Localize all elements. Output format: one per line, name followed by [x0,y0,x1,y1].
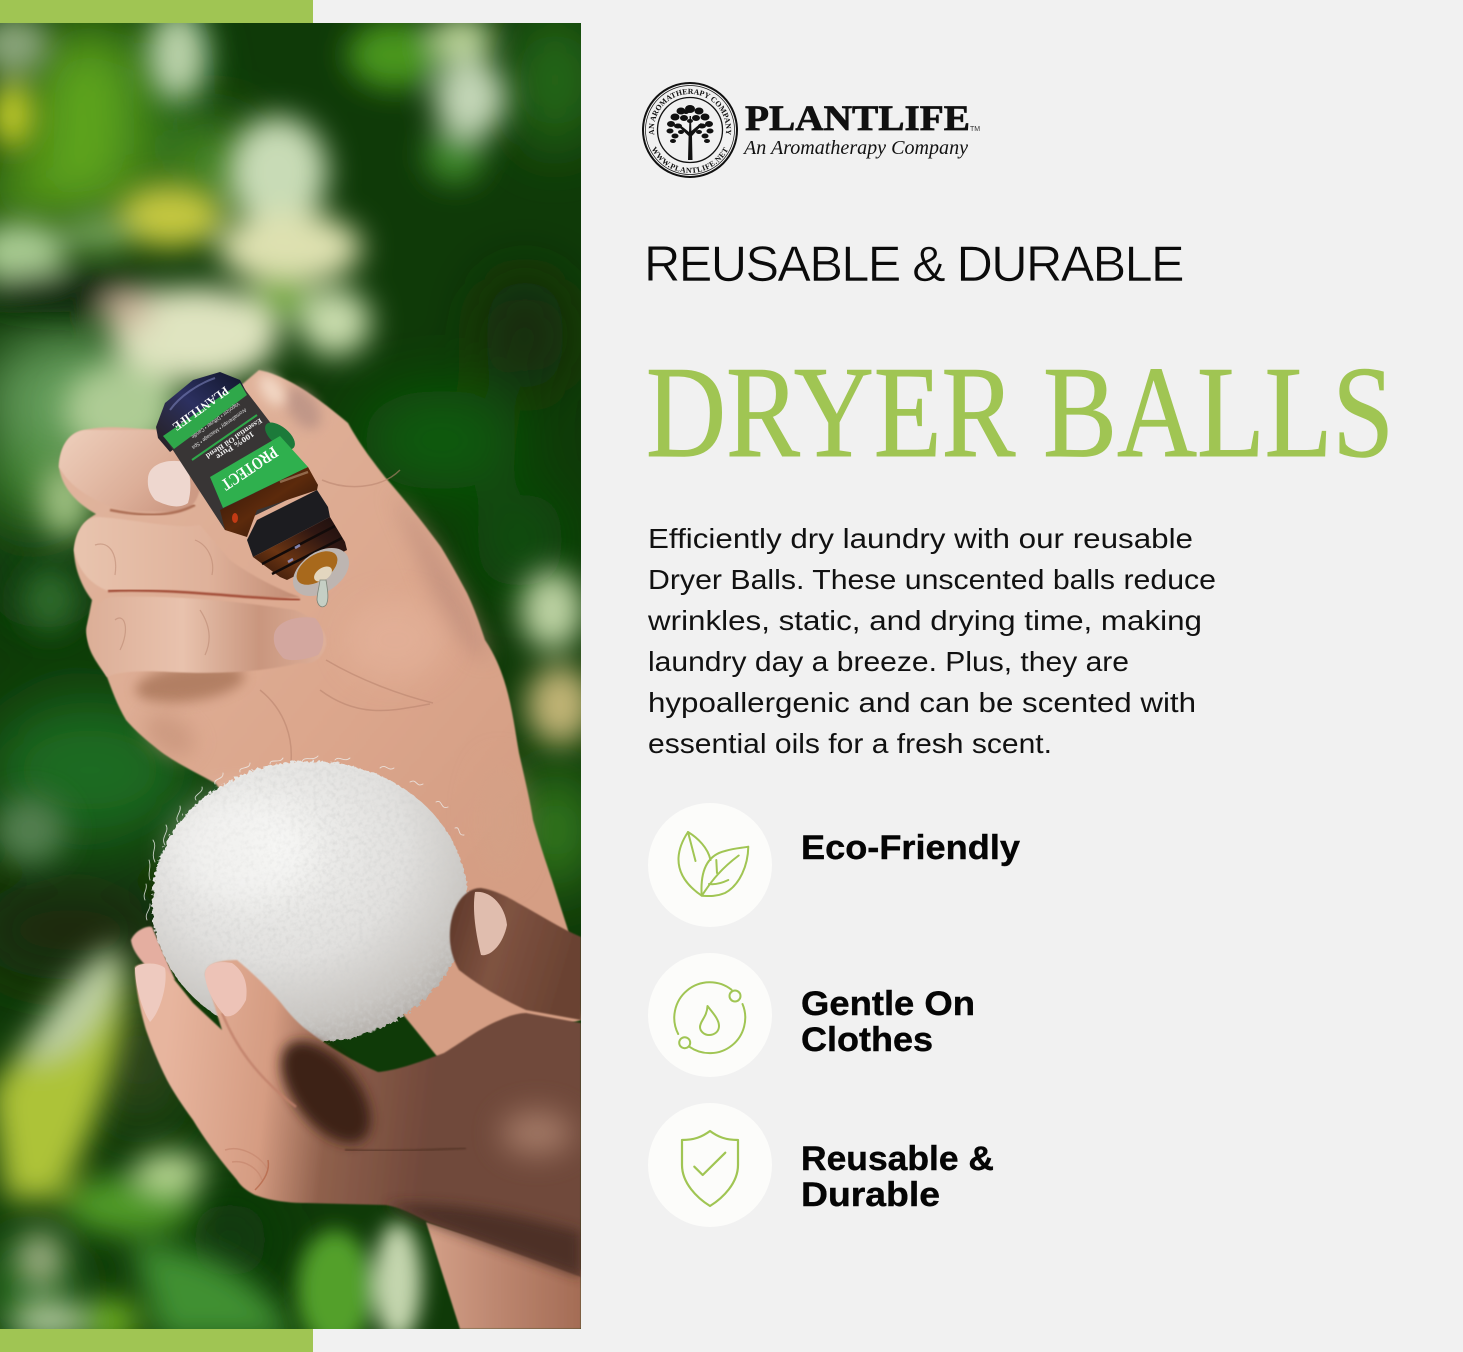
thumb [450,888,581,1020]
body paragraph: Dryer Balls. These unscented balls reduce [648,564,1216,595]
label text: uses: Aromatherapy • Massage • Spa [190,406,247,450]
trademark: TM [970,126,980,133]
wool dryer ball [144,756,468,1043]
bottle opening [284,538,358,606]
logo tagline: An Aromatherapy Company [742,137,968,159]
label text: Protect: PROTECT [217,443,281,495]
label [801,985,975,1059]
amber glass shoulder [220,467,318,537]
label text: uses 2: Vaporizer • Diffuser • Candle [190,400,240,439]
label: Durable [801,1176,940,1214]
label text: blend name: 100% Pure [214,429,256,462]
crease at back of hand [345,1148,466,1151]
palm creases [260,470,433,770]
palm and back of hand [135,960,581,1277]
essential oil bottle [156,372,358,607]
subheading: REUSABLE & DURABLE [644,236,1183,292]
ring finger [87,597,326,677]
feature: Reusable & Durable [648,1103,994,1227]
threaded neck [253,517,347,580]
neck threads [262,526,342,574]
body paragraph: laundry day a breeze. Plus, they are [648,646,1129,677]
feature: Eco-Friendly [648,803,1020,927]
label text: Plantlife: PLANTLIFE [170,384,231,434]
ring fingernail [274,617,323,660]
second finger nail [205,962,247,1016]
green pinstripe [192,415,257,460]
body paragraph: wrinkles, static, and drying time, making [647,605,1202,636]
lower hand [135,888,581,1277]
logo wordmark: PLANTLIFE [745,98,970,138]
icon: leaves [648,803,772,927]
wool highlights [170,795,310,905]
label text: essential oil blend: Essential Oil Blend [203,416,264,461]
bottom green accent bar [0,1329,313,1352]
thumb nail [474,892,507,955]
finger crease [222,1013,296,1107]
panel: photo of hands with bottle and dryer ball [0,0,594,1350]
label body [165,383,318,530]
feature: Gentle On Clothes [648,953,975,1077]
icon: water drop in orbit [648,953,772,1077]
stray wool fibres [144,756,464,920]
protect band [210,436,308,508]
foliage background [0,0,594,1350]
green band [163,383,247,449]
logo seal: AN AROMATHERAPY COMPANY [648,88,732,135]
logo seal: WWW.PLANTLIFE.NET [652,146,728,173]
dropper tip [311,563,335,585]
finger shadow on hand [272,1032,378,1150]
neck ring [247,490,330,557]
index finger [59,430,200,513]
body paragraph: hypoallergenic and can be scented with [648,687,1196,718]
upper hand [59,370,581,1060]
middle finger [74,517,300,598]
shoulder highlight [280,472,308,482]
body paragraph: Efficiently dry laundry with our reusable [648,523,1193,554]
logo seal [642,82,738,178]
knuckle lines [95,540,213,655]
first finger nail [135,964,166,1022]
hand silhouette [59,370,581,1060]
label: Gentle On [801,985,975,1023]
oil drop [317,580,328,607]
logo: Plantlife [642,82,980,178]
hand shading [385,1111,581,1277]
back finger behind ball [131,927,175,980]
body paragraph [647,523,1216,759]
hand shading [133,370,522,880]
label: Reusable & [801,1140,994,1178]
knuckle lines [225,1149,268,1190]
label: Clothes [801,1021,933,1059]
top green accent bar [0,0,313,23]
label: Eco-Friendly [801,829,1020,867]
logo tree [666,105,714,160]
middle finger crease [108,590,300,600]
orifice amber [291,544,343,592]
index fingernail [148,461,190,506]
cap highlight [170,378,215,410]
body paragraph: essential oils for a fresh scent. [648,728,1052,759]
underside of index finger shadow [110,505,195,515]
leaf mark on label [265,422,295,449]
bottle cap end [156,372,247,452]
red glint [232,513,238,523]
label [801,1140,994,1214]
icon: shield with check [648,1103,772,1227]
forearm below lower hand [426,1222,581,1329]
